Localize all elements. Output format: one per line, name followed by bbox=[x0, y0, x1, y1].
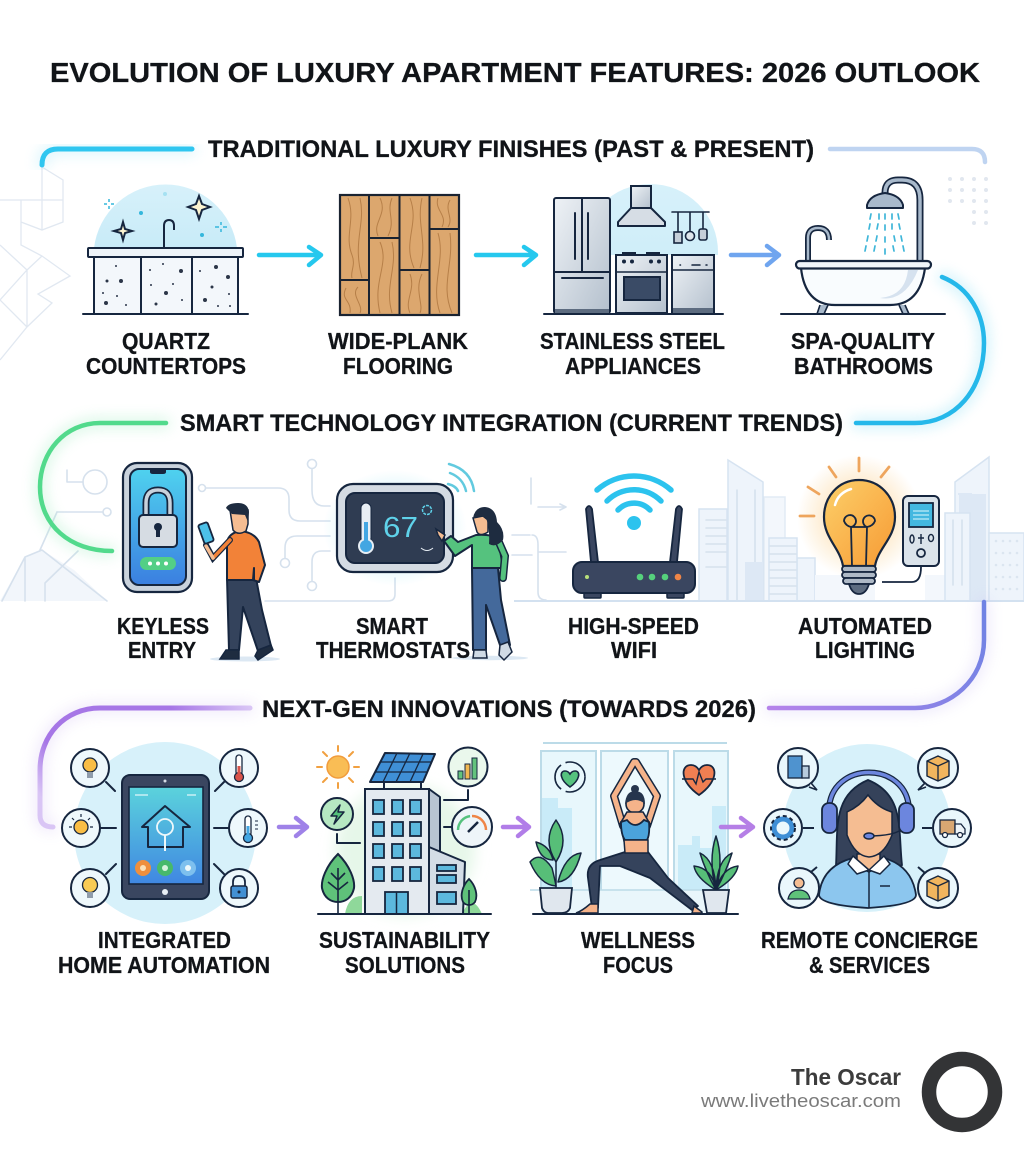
label: quartz countertops: QUARTZ bbox=[122, 328, 210, 354]
label: stainless steel appliances: STAINLESS STEEL bbox=[540, 328, 725, 354]
label: wide-plank flooring: WIDE-PLANK bbox=[328, 328, 468, 354]
icon: stainless steel appliances bbox=[544, 184, 723, 320]
label: keyless entry: KEYLESS bbox=[117, 613, 209, 639]
dishwasher bbox=[672, 255, 714, 313]
left mountain shapes bbox=[0, 470, 111, 601]
service: parcel top bbox=[918, 748, 958, 790]
sun bbox=[317, 746, 359, 788]
icon: spa-quality bathtub and shower bbox=[781, 180, 945, 314]
label: remote concierge and services: REMOTE CONCIERGE bbox=[761, 927, 978, 953]
connector: green arc bbox=[40, 423, 166, 551]
range hood bbox=[618, 186, 665, 226]
label: keyless entry bbox=[117, 613, 209, 663]
potted plant left bbox=[530, 820, 581, 913]
arrow: appliances to bathrooms bbox=[731, 246, 779, 265]
yoga figure bbox=[576, 762, 702, 913]
decorative dot grid bbox=[948, 177, 988, 225]
satellite: blue thermometer bbox=[229, 809, 267, 847]
label: spa-quality bathrooms: SPA-QUALITY bbox=[791, 328, 935, 354]
icon: integrated home automation tablet bbox=[62, 742, 267, 924]
label: sustainability solutions bbox=[319, 927, 490, 978]
section heading: smart technology integration: SMART TECHNOLOGY INTEGRATION (CURRENT TRENDS) bbox=[180, 410, 843, 437]
label: wide-plank flooring: FLOORING bbox=[343, 353, 453, 379]
energy callouts bbox=[321, 748, 492, 847]
arrow: sustainability to wellness bbox=[503, 818, 529, 836]
skyline bbox=[514, 457, 1024, 601]
label: high-speed wifi: WIFI bbox=[611, 637, 657, 663]
label: spa-quality bathrooms bbox=[791, 328, 935, 379]
label: quartz countertops bbox=[86, 328, 246, 379]
label: stainless steel appliances bbox=[540, 328, 725, 379]
stove bbox=[616, 252, 667, 313]
label: automated lighting: LIGHTING bbox=[815, 637, 915, 663]
circuit traces bbox=[198, 460, 566, 601]
label: high-speed wifi: HIGH-SPEED bbox=[568, 613, 699, 639]
label: integrated home automation: INTEGRATED bbox=[98, 927, 231, 953]
service: gear bbox=[764, 809, 814, 847]
section heading: next-gen innovations: NEXT-GEN INNOVATIONS (TOWARDS 2026) bbox=[262, 696, 756, 723]
label: wellness focus: FOCUS bbox=[603, 952, 673, 978]
label: smart thermostats: SMART bbox=[356, 613, 429, 639]
icon: remote concierge bbox=[764, 744, 971, 912]
label: keyless entry: ENTRY bbox=[128, 637, 196, 663]
title: EVOLUTION OF LUXURY APARTMENT FEATURES: 2026 OUTLOOK bbox=[50, 57, 980, 88]
service: building bbox=[778, 748, 818, 790]
arrow: flooring to appliances bbox=[476, 247, 536, 265]
connector: pale blue top-right bracket bbox=[830, 149, 985, 162]
arrow: automation to sustainability bbox=[279, 818, 307, 836]
label: wellness focus bbox=[581, 927, 695, 978]
logo ring bbox=[929, 1059, 995, 1125]
label: high-speed wifi bbox=[568, 613, 699, 663]
satellite: red thermometer bbox=[220, 749, 258, 787]
fridge bbox=[554, 198, 610, 313]
arrow: quartz to flooring bbox=[259, 247, 321, 265]
thermostat reading: 67 bbox=[383, 512, 418, 544]
label: spa-quality bathrooms: BATHROOMS bbox=[794, 353, 933, 379]
satellite: bulb lower-left bbox=[71, 869, 109, 907]
label: sustainability solutions: SOLUTIONS bbox=[345, 952, 465, 978]
figure: woman touching thermostat bbox=[436, 507, 528, 660]
label: remote concierge and services: & SERVICES bbox=[809, 952, 930, 978]
icon: smart thermostat bbox=[323, 464, 474, 586]
section heading: traditional luxury finishes: TRADITIONAL LUXURY FINISHES (PAST & PRESENT) bbox=[208, 136, 814, 163]
connector: blue arc row one to two bbox=[856, 277, 984, 423]
label: smart thermostats bbox=[316, 613, 470, 663]
service: delivery truck bbox=[922, 809, 971, 847]
label: automated lighting: AUTOMATED bbox=[798, 613, 932, 639]
label: wellness focus: WELLNESS bbox=[581, 927, 695, 953]
connector: purple bracket to row three bbox=[40, 708, 250, 827]
label: smart thermostats: THERMOSTATS bbox=[316, 637, 470, 663]
icon: smart light bulb and controller bbox=[797, 455, 939, 594]
potted plant right bbox=[694, 836, 738, 913]
utensils bbox=[672, 212, 709, 243]
solar panel bbox=[370, 753, 435, 789]
icon: wifi router bbox=[573, 476, 695, 598]
label: sustainability solutions: SUSTAINABILITY bbox=[319, 927, 490, 953]
footer website: www.livetheoscar.com bbox=[700, 1090, 901, 1111]
label: remote concierge and services bbox=[761, 927, 978, 978]
footer brand name: The Oscar bbox=[791, 1064, 901, 1090]
icon: wide-plank flooring bbox=[340, 195, 459, 315]
satellite: bulb top-left bbox=[71, 749, 109, 787]
green heart badge bbox=[555, 762, 585, 792]
arrow: wellness to concierge bbox=[721, 818, 753, 836]
satellite: bulb middle-left bbox=[62, 809, 100, 847]
label: quartz countertops: COUNTERTOPS bbox=[86, 353, 246, 379]
icon: smartphone lock bbox=[123, 463, 192, 592]
trees bbox=[322, 854, 476, 914]
connector: purple arc row two to three bbox=[769, 602, 984, 708]
label: integrated home automation: HOME AUTOMATION bbox=[58, 952, 270, 978]
icon: sustainable building bbox=[317, 746, 492, 916]
satellite: padlock bbox=[220, 869, 258, 907]
agent figure bbox=[819, 772, 916, 908]
connector: cyan top-left bracket bbox=[42, 149, 192, 165]
figure: man using phone bbox=[198, 503, 280, 662]
label: stainless steel appliances: APPLIANCES bbox=[565, 353, 701, 379]
label: automated lighting bbox=[798, 613, 932, 663]
label: integrated home automation bbox=[58, 927, 270, 978]
service: resident bbox=[779, 867, 819, 908]
label: wide-plank flooring bbox=[328, 328, 468, 379]
service: parcel bottom bbox=[918, 867, 958, 908]
icon: quartz countertop bbox=[83, 184, 248, 314]
background skyline and circuit lines bbox=[0, 457, 1024, 601]
background line art: upper-left polygons bbox=[0, 167, 70, 360]
icon: wellness yoga scene bbox=[530, 743, 738, 914]
orange heartbeat bbox=[682, 765, 716, 795]
